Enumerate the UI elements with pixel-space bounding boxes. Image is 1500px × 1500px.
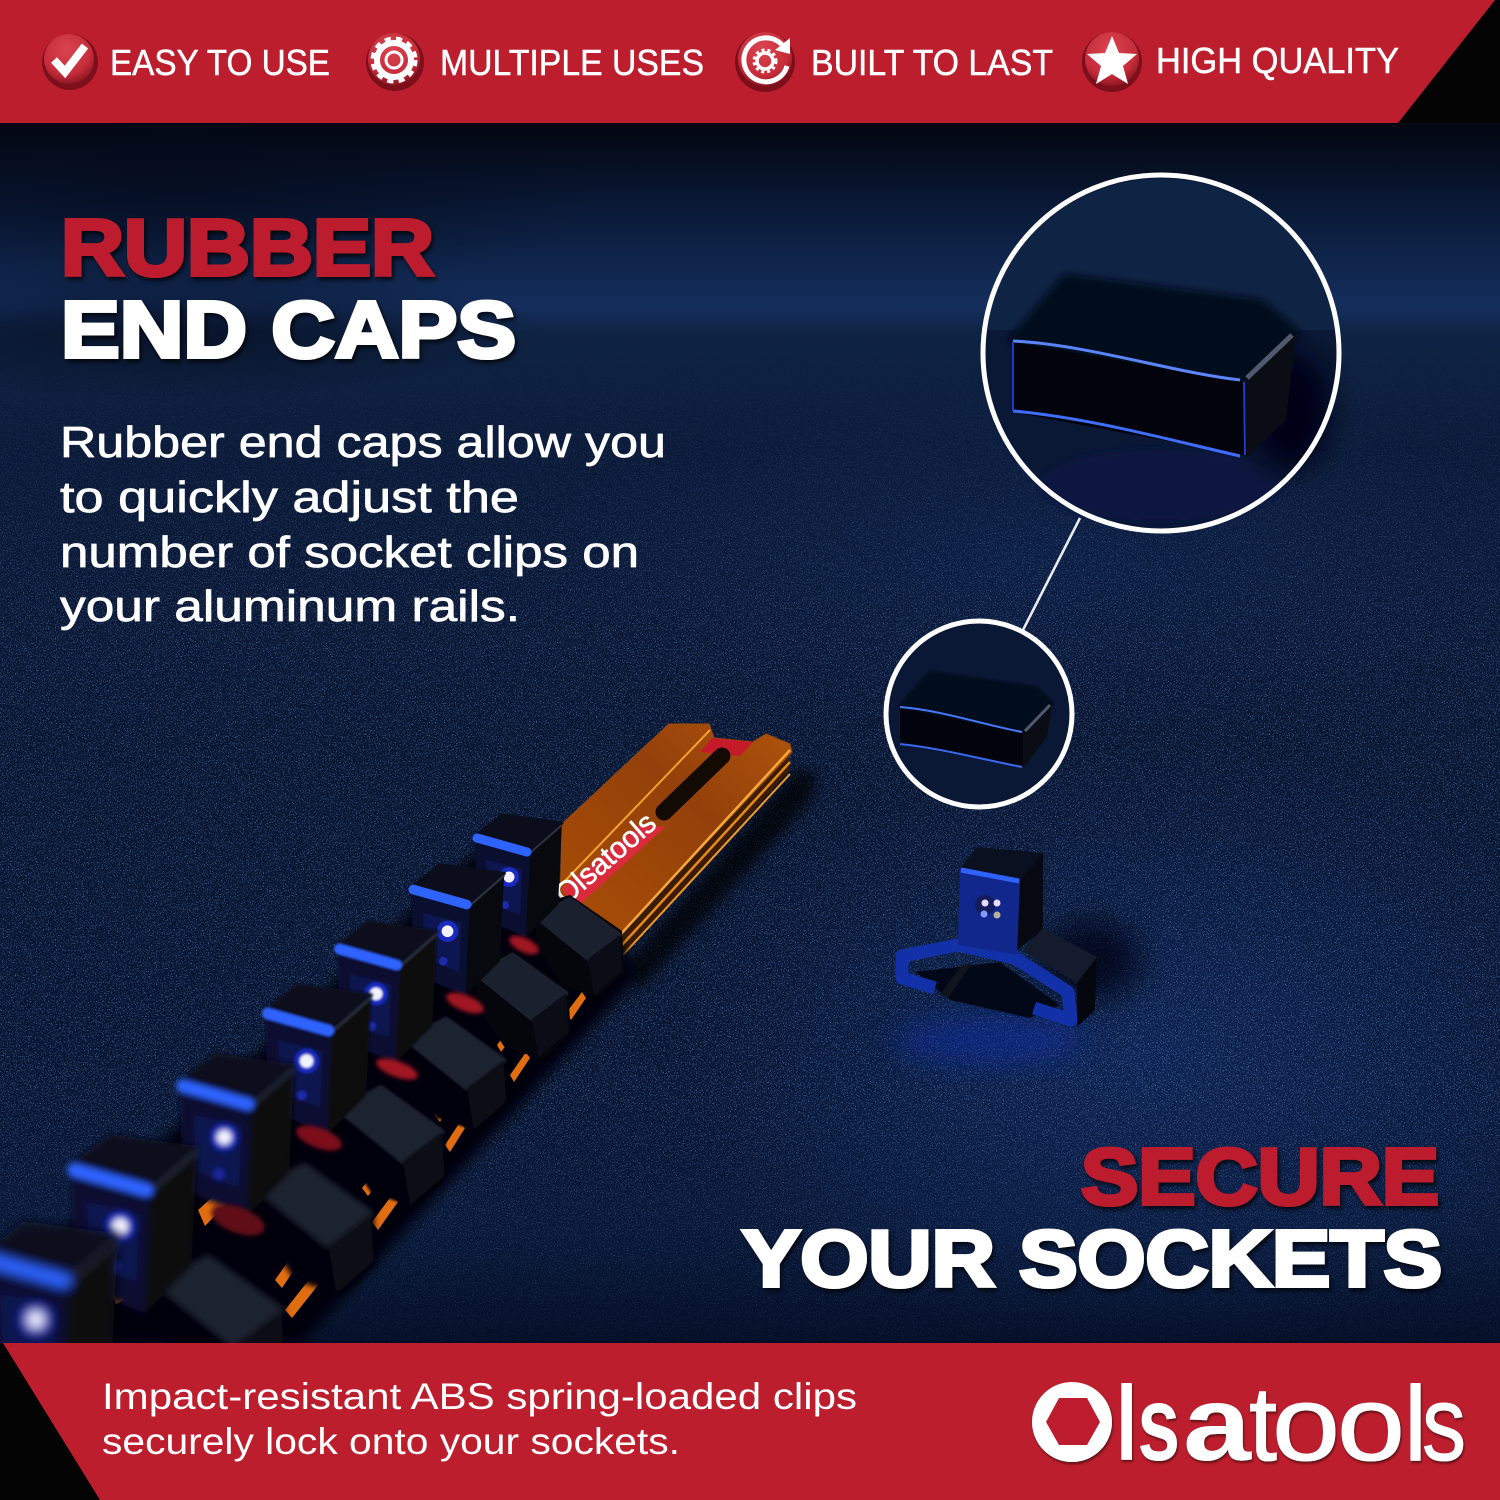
clip 2	[410, 865, 571, 1060]
logo: l	[1404, 1365, 1427, 1483]
top banner	[0, 0, 1500, 123]
clip 5	[178, 1055, 376, 1296]
label: multiple uses: MULTIPLE USES	[440, 42, 704, 83]
aluminum rail	[549, 724, 818, 990]
icon: check mark	[42, 34, 98, 90]
logo: a	[1183, 1365, 1252, 1483]
red reflections between clips	[207, 932, 541, 1242]
heading: secure your sockets: YOUR SOCKETS	[742, 1214, 1442, 1303]
body text: Rubber end caps allow you	[60, 418, 666, 467]
label: easy to use: EASY TO USE	[110, 42, 330, 83]
icon: gear	[366, 33, 424, 91]
clip 6	[69, 1136, 287, 1400]
heading: rubber end caps: END CAPS	[61, 285, 516, 374]
logo: t	[1249, 1365, 1277, 1483]
body text: number of socket clips on	[60, 528, 639, 577]
clip 4	[264, 985, 447, 1207]
icon: star	[1082, 32, 1142, 92]
banner text: securely lock onto your sockets.	[102, 1421, 680, 1462]
bottom banner	[0, 1343, 1500, 1500]
callout: large magnified end cap	[983, 175, 1339, 531]
heading: rubber end caps: RUBBER	[61, 203, 434, 292]
label: high quality: HIGH QUALITY	[1156, 40, 1399, 81]
connector line	[1023, 518, 1080, 630]
logo: s	[1422, 1365, 1466, 1483]
body text: to quickly adjust the	[60, 473, 519, 522]
banner text: Impact-resistant ABS spring-loaded clips	[102, 1376, 857, 1417]
clip 1	[474, 815, 624, 997]
banner text	[102, 1376, 857, 1462]
clip 7	[0, 1224, 214, 1500]
clip 3	[336, 922, 508, 1132]
body text	[60, 418, 666, 631]
icon: circular arrow gear	[735, 32, 795, 92]
rail logo label: Olsatools	[549, 806, 663, 911]
heading: secure your sockets	[742, 1132, 1442, 1303]
logo: o	[1337, 1365, 1405, 1483]
clips on rail	[0, 815, 640, 1500]
logo	[1032, 1365, 1466, 1483]
callout: small end cap on fabric	[886, 621, 1072, 807]
heading: rubber end caps	[61, 203, 516, 374]
loose socket clip	[895, 847, 1140, 1064]
label: built to last: BUILT TO LAST	[811, 42, 1053, 83]
body text: your aluminum rails.	[60, 582, 520, 631]
logo: ls	[1116, 1365, 1180, 1483]
heading: secure your sockets: SECURE	[1081, 1132, 1439, 1221]
logo: o	[1272, 1365, 1340, 1483]
logo: O	[1036, 1368, 1108, 1480]
